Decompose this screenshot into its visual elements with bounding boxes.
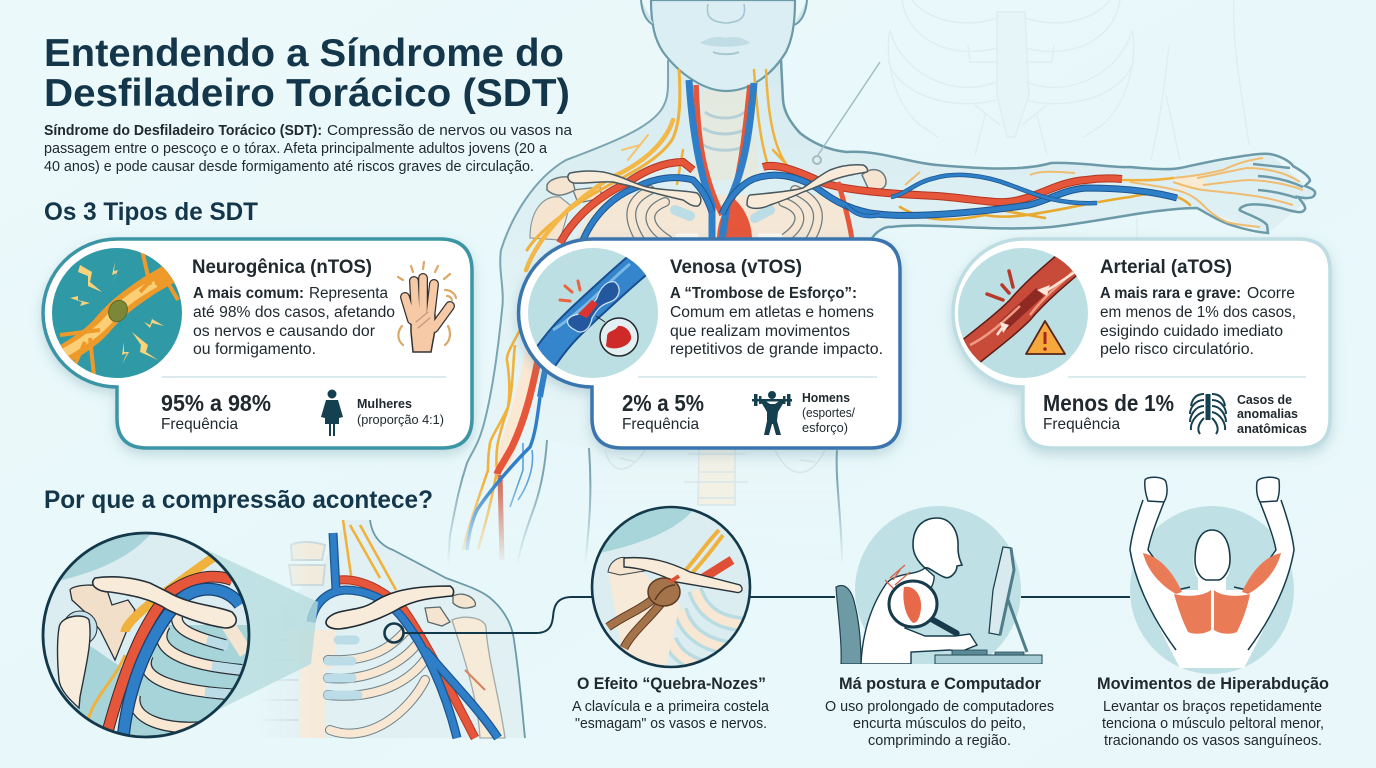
caption: nutcracker: "esmagam" os vasos e nervos. [575,716,767,732]
caption: hyperabduction: tracionando os vasos sanguíneos. [1104,733,1322,749]
hand tendons [905,158,1303,227]
caption: nutcracker [572,674,770,732]
nerves [526,70,1190,270]
card description: esigindo cuidado imediato [1100,323,1283,340]
introduction text [44,123,572,175]
introduction text: Compressão de nervos ou vasos na [327,123,572,139]
head [1195,530,1230,580]
introduction text: 40 anos) e pode causar desde formigamento até riscos graves de circulação. [44,159,534,175]
magnified detail circle [40,530,255,740]
card heading: Neurogênica (nTOS) [192,257,372,278]
neck and trachea [692,90,760,180]
stat: frequency: 2% a 5% [622,390,704,416]
small shoulder anatomy [250,520,525,738]
shoulder silhouette [250,520,525,738]
panel: venous [519,239,900,448]
icon: rib cage [1190,394,1226,434]
clavicles [568,165,868,208]
divider [638,376,877,378]
zoom beam [207,550,318,712]
icon: hand with tingling [398,262,456,352]
card description: ou formigamento. [193,341,316,358]
faint spine and lower ribs under the cards [605,448,825,505]
connector line [404,597,1130,633]
demographic: esforço) [802,421,848,435]
marker ring [384,624,404,642]
icon: neuron [52,248,182,378]
stat: frequency [1043,390,1174,433]
stat: frequency [161,390,271,433]
vessels [311,520,498,738]
title: Desfiladeiro Torácico (SDT) [44,72,570,115]
stat: frequency: Frequência [161,416,238,433]
caption: posture: encurta músculos do peito, [853,716,1026,732]
faint ribcage background illustration [888,0,1249,240]
icon: compressed artery [956,246,1090,380]
clavicle [93,577,236,628]
demographic: anomalias [1237,407,1298,421]
stat: frequency: 95% a 98% [161,390,271,416]
ribs [668,588,743,665]
card heading: Arterial (aTOS) [1100,257,1232,278]
caption: posture: O uso prolongado de computadores [825,699,1054,715]
card heading: Venosa (vTOS) [670,257,802,278]
icon: weightlifter [752,391,792,435]
demographic [357,397,444,427]
human body with head and outstretched arm [448,0,1315,565]
stat: frequency: Frequência [622,416,699,433]
card description: repetitivos de grande impacto. [670,341,883,358]
card description: pelo risco circulatório. [1100,341,1254,358]
introduction text: passagem entre o pescoço e o tórax. Afeta principalmente adultos jovens (20 a [44,141,547,157]
card description [670,285,883,358]
heading: types: Os 3 Tipos de SDT [44,198,258,226]
stat: frequency [622,390,704,433]
card description: A mais rara e grave: [1100,285,1241,302]
caption: posture [825,674,1054,749]
torso [861,568,977,664]
card description: Ocorre [1247,285,1295,302]
caption: hyperabduction: tenciona o músculo peltoral menor, [1102,716,1324,732]
demographic [802,391,855,435]
icon: thrombosis [526,246,660,380]
illustration: nutcracker effect [590,505,755,670]
demographic: (proporção 4:1) [357,413,444,427]
title: Entendendo a Síndrome do [44,32,564,75]
card description: até 98% dos casos, afetando [193,304,395,321]
stat: frequency: Frequência [1043,416,1120,433]
caption: posture: comprimindo a região. [868,733,1011,749]
body silhouette [448,60,1315,565]
stat: frequency: Menos de 1% [1043,390,1174,416]
fists [1145,477,1279,502]
card description: Comum em atletas e homens [670,304,874,321]
panel: neurogenic [43,239,472,448]
title [44,32,570,115]
panel: arterial [953,239,1330,448]
pliers [608,576,680,648]
vessels [88,557,240,738]
illustration: raised arms [1130,477,1294,674]
head [641,0,807,91]
humerus and scapula [70,585,135,660]
demographic: (esportes/ [802,406,855,420]
card description [193,285,395,358]
strained shoulder [885,565,910,590]
card description: A mais comum: [193,285,304,302]
arm vessels below the shoulder [462,330,548,560]
body [1130,500,1294,668]
card description: os nervos e causando dor [193,323,375,340]
card description: que realizam movimentos [670,323,850,340]
arteries [560,85,1122,243]
demographic: Homens [802,391,850,405]
veins [583,80,1177,240]
illustration: poor posture at computer [836,506,1042,674]
shoulder bones [530,197,570,240]
scapula and humerus [425,594,505,738]
divider [162,376,446,378]
ribs [328,628,425,734]
card description: A “Trombose de Esforço”: [670,285,857,302]
chair [836,586,861,664]
desk and keyboard [935,655,1042,664]
demographic: Casos de [1237,393,1292,407]
muscles [1143,553,1281,634]
card description: Representa [309,285,388,302]
magnifier [889,581,957,633]
demographic: Mulheres [357,397,412,411]
heading: why compression happens: Por que a compressão acontece? [44,486,433,514]
head [913,518,962,578]
demographic: anatômicas [1237,422,1307,436]
introduction text: Síndrome do Desfiladeiro Torácico (SDT): [44,123,322,139]
ribs [135,612,246,728]
icon: woman [321,390,343,436]
demographic [1237,393,1307,436]
caption: nutcracker: O Efeito “Quebra-Nozes” [577,674,766,693]
chest bones [530,170,886,240]
caption: hyperabduction: Movimentos de Hiperabdução [1097,674,1329,693]
clavicle [326,586,454,629]
divider [1068,376,1306,378]
caption: nutcracker: A clavícula e a primeira costela [572,699,770,715]
caption: hyperabduction: Levantar os braços repetidamente [1103,699,1322,715]
caption: posture: Má postura e Computador [839,674,1041,693]
card description: em menos de 1% dos casos, [1100,304,1296,321]
callout pointer line [813,62,880,164]
monitor [1008,600,1027,652]
caption: hyperabduction [1097,674,1329,749]
card description [1100,285,1296,358]
